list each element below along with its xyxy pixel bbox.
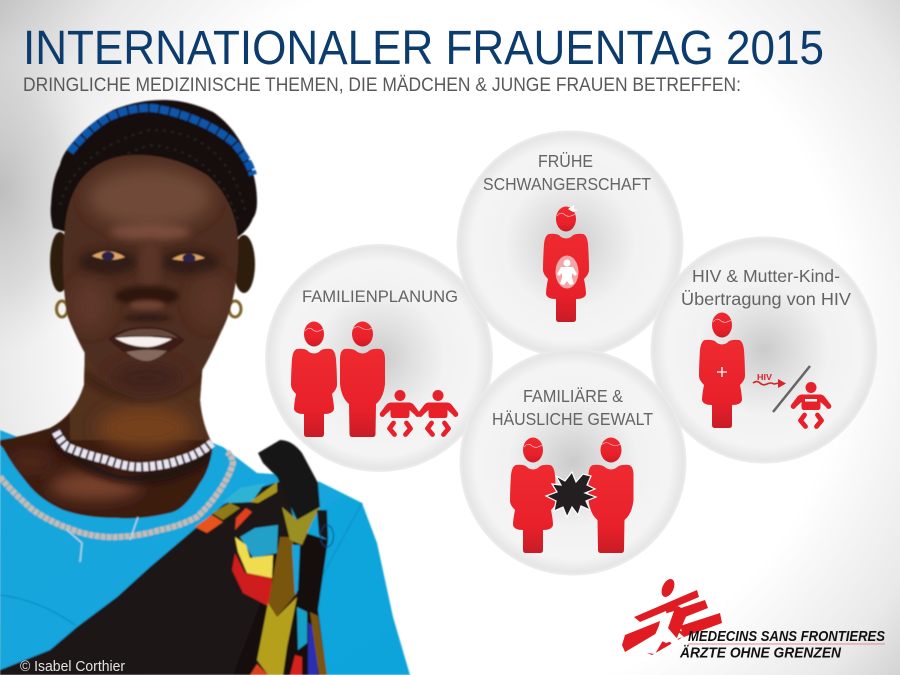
icon: man bbox=[340, 322, 385, 437]
mouth bbox=[108, 327, 185, 361]
photo credit: © Isabel Corthier bbox=[20, 659, 125, 675]
barrier line bbox=[773, 366, 810, 412]
panel: fruehe schwangerschaft bbox=[456, 130, 684, 358]
eyes bbox=[92, 251, 205, 262]
icon: woman bbox=[510, 438, 556, 553]
panel: familienplanung bbox=[265, 244, 493, 472]
title: INTERNATIONALER FRAUENTAG 2015 bbox=[23, 22, 824, 75]
icon: burst bbox=[546, 472, 596, 517]
ears bbox=[50, 232, 255, 293]
neck and chest bbox=[0, 352, 214, 520]
label: fruehe schwangerschaft: SCHWANGERSCHAFT bbox=[483, 174, 651, 194]
logo text: AeOG: ÄRZTE OHNE GRENZEN bbox=[679, 644, 842, 662]
label: hiv: HIV & Mutter-Kind- bbox=[692, 266, 840, 286]
logo: MSF running figure bbox=[622, 577, 722, 655]
blue hair band bbox=[70, 108, 253, 175]
panel: gewalt bbox=[460, 348, 686, 576]
hair bbox=[51, 100, 257, 242]
necklace bbox=[55, 430, 212, 467]
arrow: HIV transmission bbox=[753, 373, 786, 388]
panel: hiv bbox=[650, 236, 878, 464]
icon: baby one bbox=[380, 390, 420, 434]
subtitle: DRINGLICHE MEDIZINISCHE THEMEN, DIE MÄDCHEN & JUNGE FRAUEN BETREFFEN: bbox=[23, 74, 741, 96]
face bbox=[62, 154, 239, 399]
earrings bbox=[56, 301, 241, 317]
label: familienplanung: FAMILIENPLANUNG bbox=[302, 287, 458, 306]
label: gewalt: HÄUSLICHE GEWALT bbox=[492, 409, 653, 429]
shirt bbox=[0, 430, 410, 675]
icon: man bbox=[588, 438, 634, 553]
scarf knot tie bbox=[282, 507, 320, 545]
collar embroidery bbox=[0, 452, 233, 537]
icon: mother with HIV bbox=[699, 312, 745, 428]
label: gewalt: FAMILIÄRE & bbox=[523, 386, 623, 406]
loose threads bbox=[67, 517, 138, 562]
small blue wedge bbox=[233, 620, 263, 675]
icon: baby protected bbox=[791, 382, 831, 426]
black wrap bbox=[0, 480, 296, 675]
logo text: MSF: MEDECINS SANS FRONTIERES bbox=[688, 629, 885, 645]
icon: woman bbox=[291, 322, 337, 437]
scarf knot bbox=[258, 440, 320, 520]
patterned scarf bbox=[195, 482, 328, 675]
knot loop bbox=[317, 510, 334, 547]
photo: woman portrait bbox=[0, 100, 410, 675]
icon: pregnant girl bbox=[543, 205, 589, 322]
shirt fold bbox=[0, 503, 362, 625]
label: hiv: Übertragung von HIV bbox=[681, 289, 851, 309]
label: fruehe schwangerschaft: FRÜHE bbox=[538, 151, 593, 171]
arrow: HIV transmission: HIV bbox=[757, 373, 773, 382]
icon: baby two bbox=[418, 390, 458, 434]
hair braids bbox=[60, 130, 245, 220]
logo rule bbox=[688, 644, 885, 645]
